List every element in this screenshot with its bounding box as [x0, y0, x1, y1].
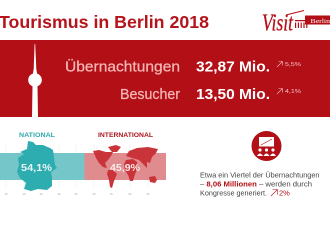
- axis labels: 10: [4, 192, 8, 196]
- change: 4,1%: [277, 88, 301, 95]
- heading: international: INTERNATIONAL: [98, 132, 153, 139]
- axis labels: 90: [146, 192, 150, 196]
- logo: Visit Berlin: [262, 10, 330, 36]
- value: 45,9%: 45,9%: [110, 162, 141, 174]
- text block: congress note: Etwa ein Viertel der Übernachtungen: [200, 172, 320, 180]
- value: 13,50 Mio.: 13,50 Mio.: [196, 86, 270, 103]
- axis labels: 20: [22, 192, 26, 196]
- map: Germany: [17, 141, 57, 191]
- icon: congress presentation: [252, 131, 282, 161]
- text block: congress note: [200, 172, 320, 198]
- value: 32,87 Mio.: 32,87 Mio.: [196, 58, 270, 76]
- axis labels: 50: [74, 192, 78, 196]
- panel: red statistics band: [0, 40, 330, 117]
- axis labels: [4, 192, 150, 196]
- axis labels: 60: [92, 192, 96, 196]
- map: world: [93, 145, 158, 188]
- value: 54,1%: 54,1%: [21, 162, 53, 174]
- logo: Visit Berlin: Berlin: [310, 18, 330, 25]
- change: 4,1%: 4,1%: [285, 89, 301, 95]
- text block: congress note: – 8,06 Millionen – werden durch: [200, 182, 312, 188]
- title: Tourismus in Berlin 2018: [0, 12, 209, 32]
- icon: Berlin TV tower: [28, 44, 42, 117]
- axis labels: 70: [109, 192, 113, 196]
- heading: national: NATIONAL: [19, 132, 55, 139]
- chart: national vs international share bar: [0, 141, 166, 196]
- change: 5,5%: [277, 62, 301, 68]
- change: 5,5%: 5,5%: [285, 62, 301, 68]
- axis labels: 40: [57, 192, 61, 196]
- label: Übernachtungen: Übernachtungen: [65, 58, 180, 76]
- text block: congress note: 2%: [279, 188, 290, 198]
- label: Besucher: Besucher: [120, 87, 180, 103]
- axis labels: 30: [39, 192, 43, 196]
- text block: congress note: Kongresse generiert.: [200, 190, 267, 198]
- axis labels: 80: [128, 192, 132, 196]
- logo: Visit Berlin: Visit: [262, 10, 294, 36]
